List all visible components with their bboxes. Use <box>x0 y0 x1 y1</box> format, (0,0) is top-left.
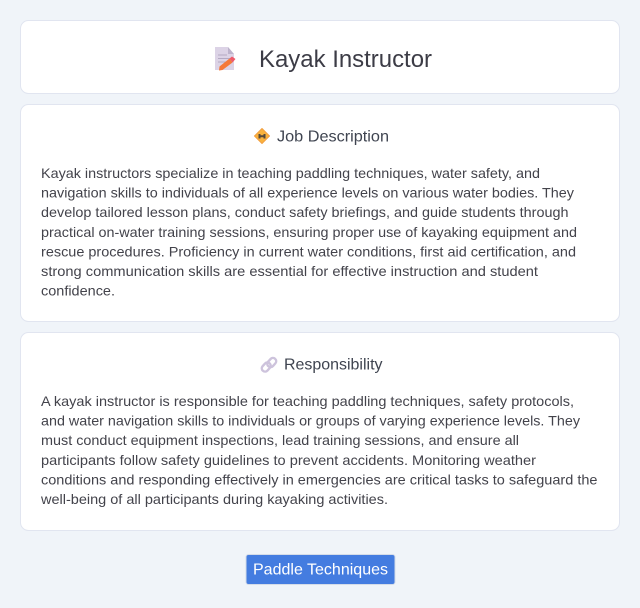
job description text: Kayak instructors specialize in teaching paddling techniques, water safety, and <box>41 165 540 181</box>
title text: Kayak Instructor <box>259 46 432 73</box>
responsibility text <box>40 393 598 507</box>
icon: orange diamond sign <box>254 128 270 144</box>
tag button: paddle techniques <box>246 554 395 584</box>
panel: job description <box>20 104 620 322</box>
tag button: paddle techniques: Paddle Techniques <box>253 562 388 578</box>
responsibility text: conditions and responding effectively in emergencies are critical tasks to safeguard the <box>41 471 598 487</box>
job description text: practical on-water training sessions, ensuring proper use of kayaking equipment and <box>41 224 577 240</box>
responsibility text: well-being of all participants during kayaking activities. <box>40 491 388 507</box>
job description text: strong communication skills are essential for effective instruction and student <box>41 263 538 279</box>
heading: responsibility: Responsibility <box>284 356 382 374</box>
responsibility text: A kayak instructor is responsible for teaching paddling techniques, safety protocols, <box>41 393 574 409</box>
icon: document with pencil <box>215 47 236 70</box>
job description text: navigation skills to individuals of all experience levels on various water bodies. They <box>41 185 574 201</box>
responsibility text: and water navigation skills to individuals or groups of varying experience levels. They <box>41 413 580 429</box>
job description text: rescue procedures. Proficiency in current water conditions, first aid certification, and <box>41 243 576 259</box>
job description text <box>41 165 577 299</box>
job description text: confidence. <box>41 283 115 299</box>
icon: chain link <box>260 357 277 373</box>
panel: responsibility <box>20 332 620 530</box>
responsibility text: participants follow safety guidelines to prevent accidents. Monitoring weather <box>41 452 536 468</box>
heading: job description: Job Description <box>277 128 389 146</box>
responsibility text: must conduct equipment inspections, lead training sessions, and ensure all <box>41 432 519 448</box>
job description text: develop tailored lesson plans, conduct safety briefings, and guide students through <box>41 204 568 220</box>
panel: title <box>20 20 620 94</box>
